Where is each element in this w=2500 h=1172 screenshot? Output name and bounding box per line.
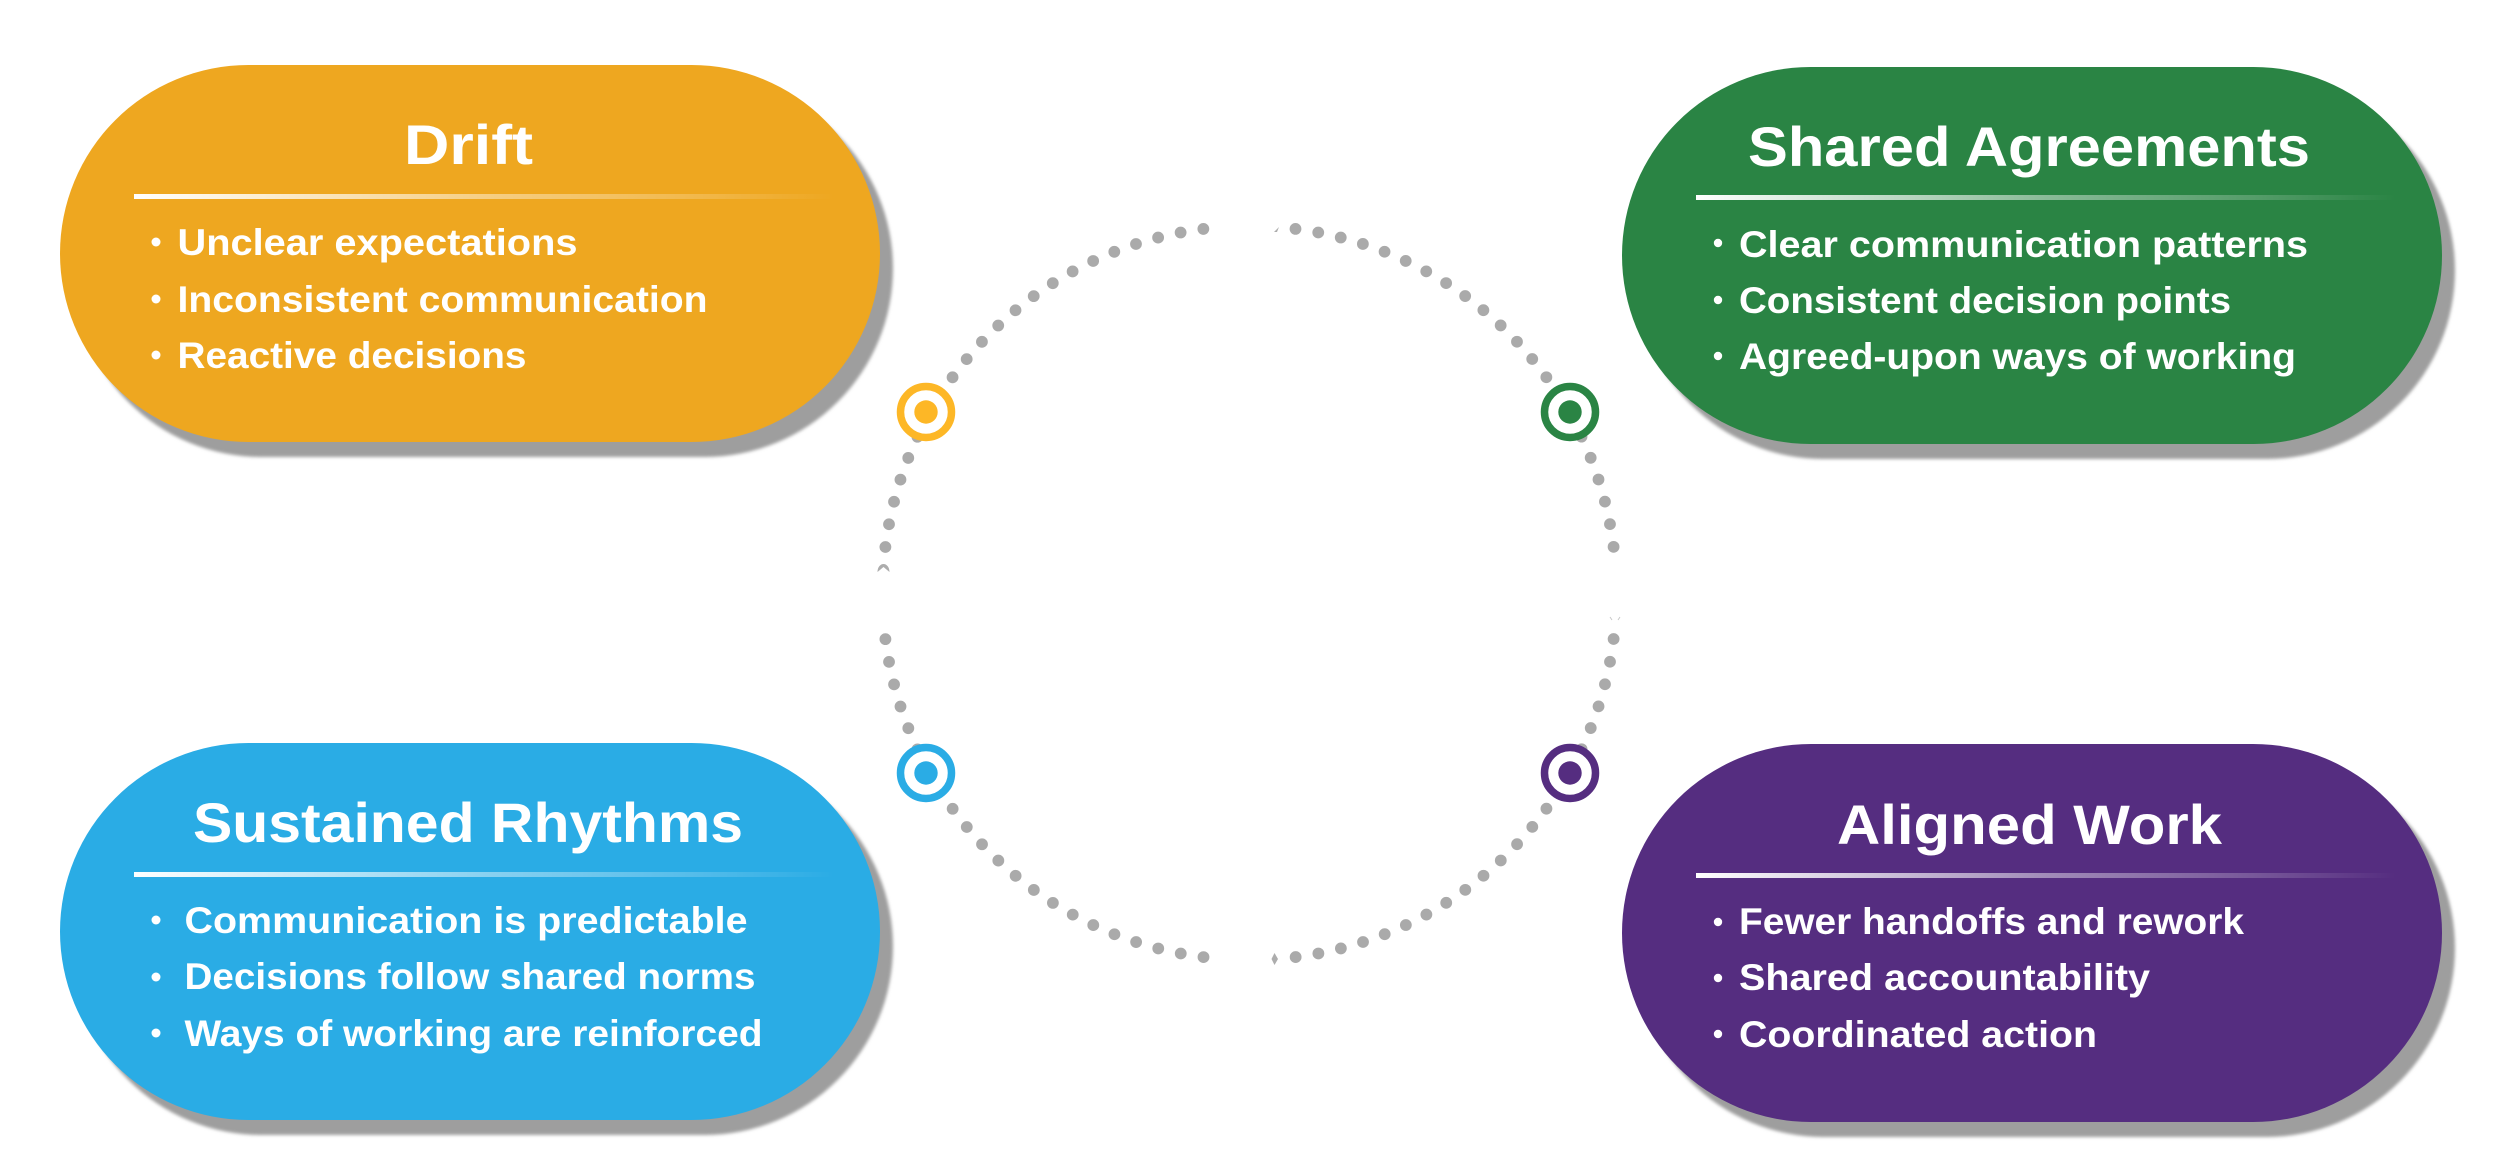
marker: shared agreements — [1544, 386, 1596, 438]
heading: shared agreements: Shared Agreements — [1748, 115, 2310, 178]
panel: sustained rhythms — [60, 743, 893, 1135]
marker: drift — [900, 386, 952, 438]
heading: sustained rhythms: Sustained Rhythms — [193, 791, 743, 854]
list: aligned work items: Shared accountability — [1739, 957, 2150, 998]
list: sustained rhythms items: Communication is predictable — [184, 900, 748, 941]
list: shared agreements items: Agreed-upon ways of working — [1739, 336, 2296, 377]
list: drift items — [152, 222, 708, 376]
panel: aligned work — [1622, 744, 2455, 1137]
list: drift items: Inconsistent communication — [178, 279, 708, 320]
list: sustained rhythms items: Ways of working are reinforced — [184, 1013, 762, 1054]
list: shared agreements items — [1714, 224, 2308, 377]
heading: drift: Drift — [404, 113, 533, 176]
dotted circle ring — [878, 227, 1620, 965]
list: sustained rhythms items — [152, 900, 762, 1054]
list: aligned work items: Coordinated action — [1739, 1014, 2097, 1055]
panel: shared agreements — [1622, 67, 2455, 459]
list: shared agreements items: Clear communication patterns — [1739, 224, 2308, 265]
marker: sustained rhythms — [900, 748, 952, 798]
panel: drift — [60, 65, 893, 457]
list: sustained rhythms items: Decisions follow shared norms — [184, 956, 756, 997]
marker: aligned work — [1544, 748, 1596, 798]
list: drift items: Reactive decisions — [178, 335, 526, 376]
list: drift items: Unclear expectations — [178, 222, 578, 263]
heading: aligned work: Aligned Work — [1837, 793, 2223, 856]
list: aligned work items: Fewer handoffs and rework — [1739, 901, 2244, 942]
list: shared agreements items: Consistent decision points — [1739, 280, 2231, 321]
list: aligned work items — [1714, 901, 2244, 1055]
